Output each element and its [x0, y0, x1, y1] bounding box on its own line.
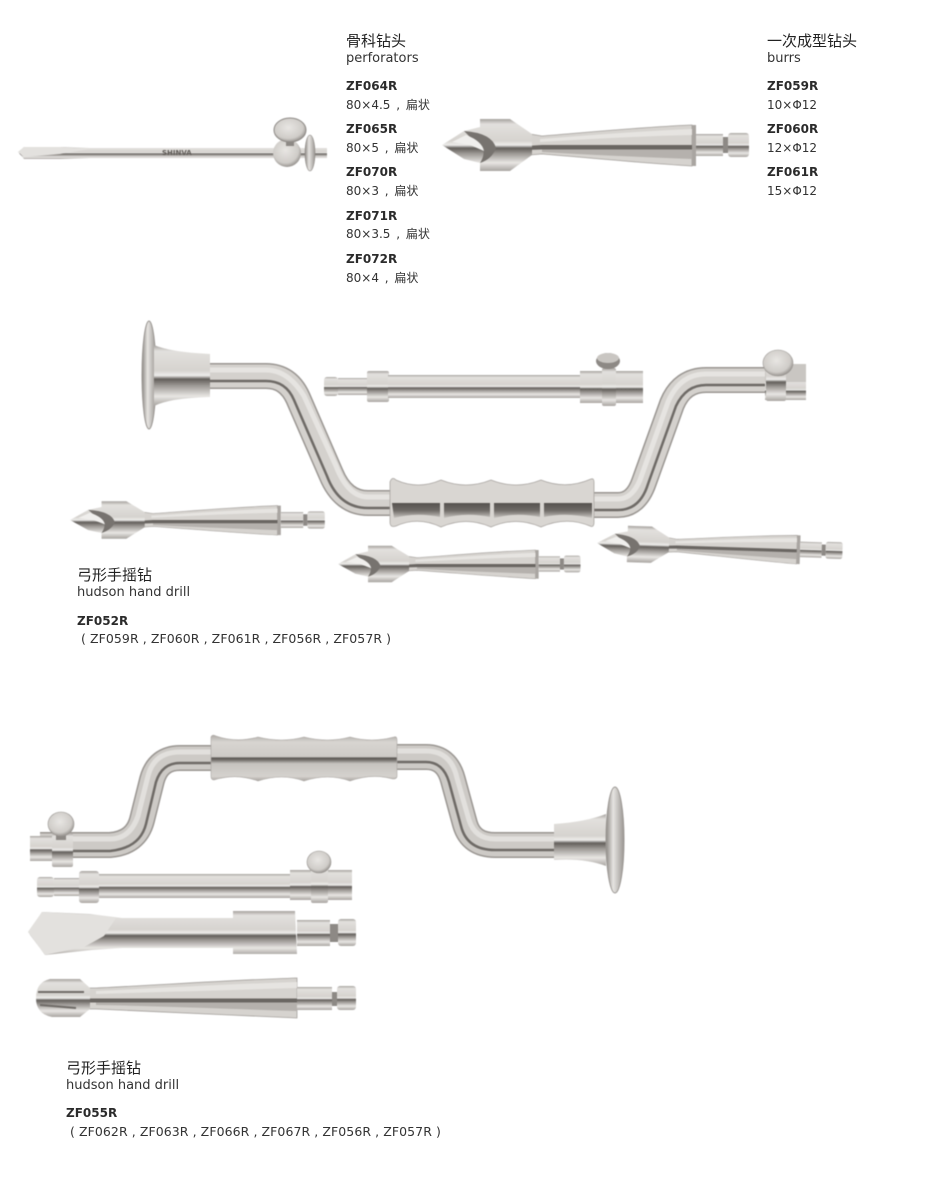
text block: hudson hand drill ZF052R — [77, 566, 391, 646]
code list: burrs: 12×Φ12 — [767, 141, 817, 155]
code list: perforators: 80×5 , 扁状 — [346, 141, 418, 155]
burr: right — [596, 525, 843, 569]
burr: centre — [338, 546, 581, 582]
code list: perforators: 80×3 , 扁状 — [346, 184, 418, 198]
perforator: SHINVA — [162, 149, 192, 157]
round burr — [36, 978, 356, 1018]
hudson hand drill: top — [142, 321, 806, 527]
subheading: burrs: burrs — [767, 51, 801, 66]
code list: perforators: ZF072R — [346, 252, 397, 266]
code list: burrs: 15×Φ12 — [767, 184, 817, 198]
chuck rod: bottom — [37, 851, 352, 903]
code list: perforators: 80×4 , 扁状 — [346, 271, 418, 285]
product code: ZF052R — [77, 614, 128, 628]
code list: perforators — [346, 79, 430, 285]
code list: burrs: ZF061R — [767, 165, 818, 179]
code list: perforators: 80×3.5 , 扁状 — [346, 227, 430, 241]
heading: hand drill: 弓形手摇钻 — [66, 1059, 141, 1077]
heading: hand drill: 弓形手摇钻 — [77, 566, 152, 584]
chisel drill bit — [28, 911, 356, 955]
code list: perforators: ZF064R — [346, 79, 397, 93]
burr: left of hand drill — [70, 501, 325, 539]
subheading: perforators: perforators — [346, 51, 419, 66]
code list: burrs — [767, 79, 818, 198]
code list: burrs: ZF059R — [767, 79, 818, 93]
subheading: hand drill: hudson hand drill — [66, 1078, 179, 1093]
product code: ZF055R — [66, 1106, 117, 1120]
heading: perforators: 骨科钻头 — [346, 32, 406, 50]
text block: perforators — [346, 32, 430, 285]
chuck rod: top — [324, 353, 643, 406]
subheading: hand drill: hudson hand drill — [77, 585, 190, 600]
code list: perforators: ZF071R — [346, 209, 397, 223]
burr: large — [442, 119, 749, 171]
included parts: ( ZF062R , ZF063R , ZF066R , ZF067R , ZF056R , ZF057R ) — [70, 1124, 441, 1139]
hudson hand drill: bottom — [30, 735, 624, 893]
perforator — [18, 118, 327, 171]
code list: perforators: ZF065R — [346, 122, 397, 136]
text block: hudson hand drill ZF055R — [66, 1059, 441, 1139]
text block: burrs — [767, 32, 857, 198]
heading: burrs: 一次成型钻头 — [767, 32, 857, 50]
code list: burrs: ZF060R — [767, 122, 818, 136]
included parts: ( ZF059R , ZF060R , ZF061R , ZF056R , ZF057R ) — [81, 631, 391, 646]
code list: perforators: ZF070R — [346, 165, 397, 179]
code list: burrs: 10×Φ12 — [767, 98, 817, 112]
code list: perforators: 80×4.5 , 扁状 — [346, 98, 430, 112]
